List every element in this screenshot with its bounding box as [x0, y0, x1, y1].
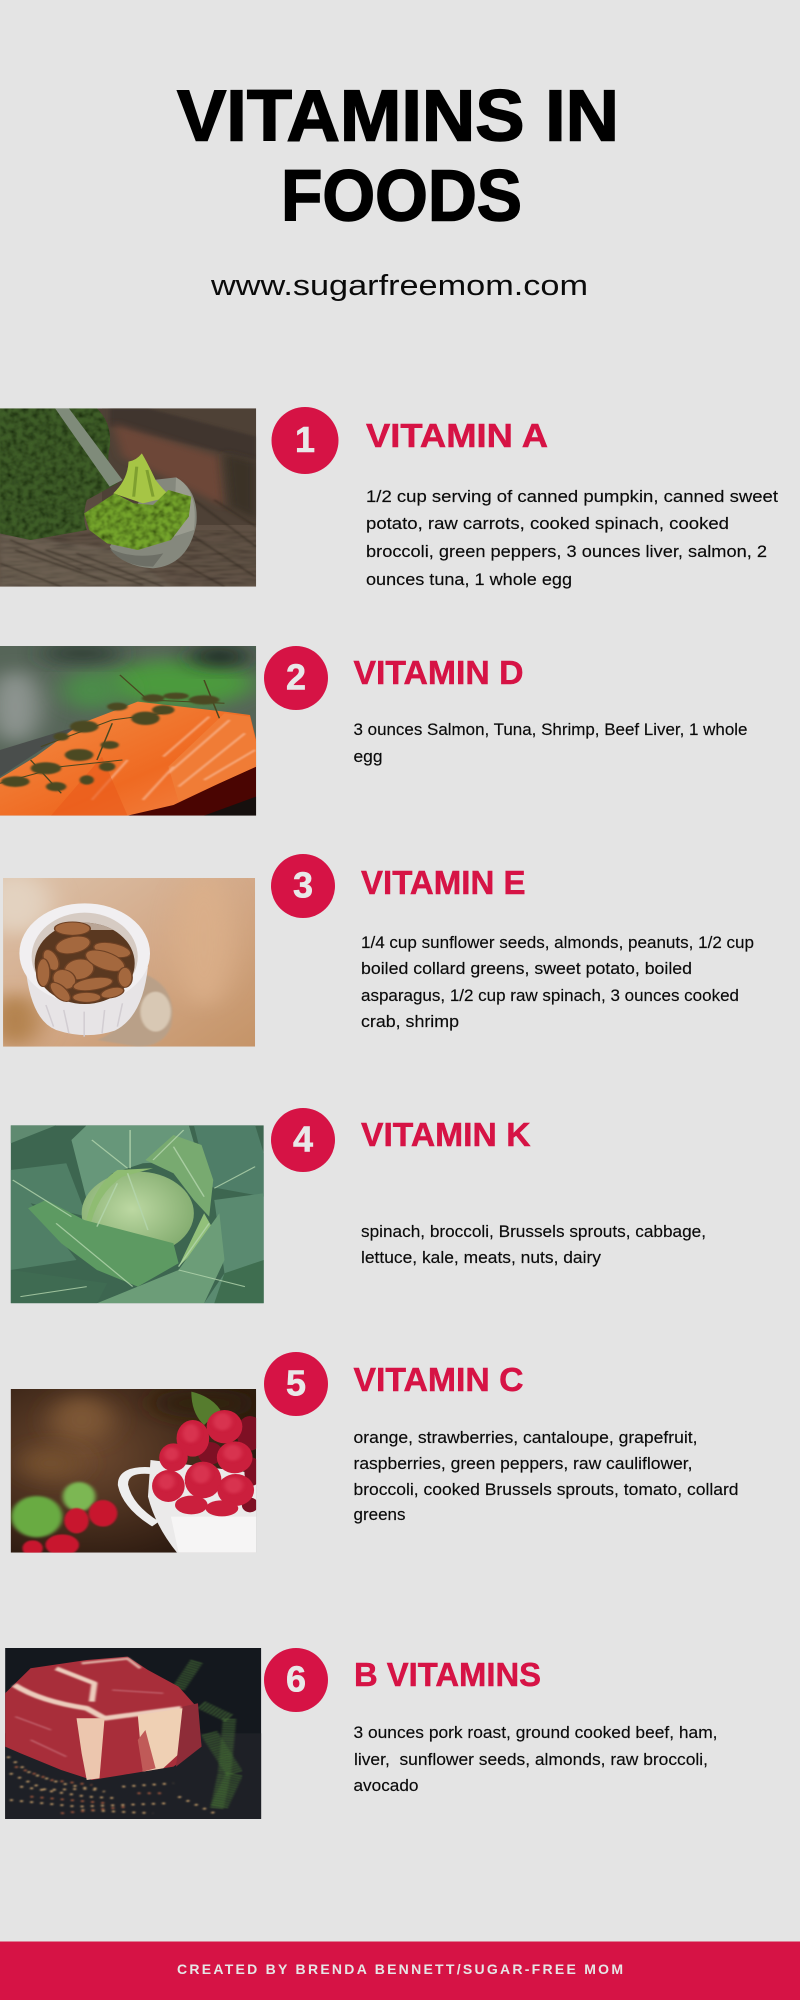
body text: vitamin C: raspberries, green peppers, raw cauliflower, — [354, 1454, 692, 1473]
number badge 1: 1 — [295, 419, 315, 460]
number badge 2: 2 — [286, 656, 306, 698]
number badge 6: 6 — [286, 1658, 306, 1700]
body text: B vitamins: 3 ounces pork roast, ground cooked beef, ham, — [354, 1723, 718, 1742]
number badge 1 — [272, 407, 338, 474]
image: salmon with herbs — [0, 645, 256, 816]
body text: B vitamins: liver, sunflower seeds, almonds, raw broccoli, — [354, 1750, 708, 1769]
number badge 4: 4 — [293, 1118, 313, 1160]
body text: B vitamins: avocado — [354, 1776, 418, 1795]
body text: vitamin A — [366, 487, 778, 589]
panel: vitamin K — [11, 1108, 706, 1303]
body text: vitamin E: boiled collard greens, sweet potato, boiled — [361, 959, 692, 978]
number badge 5: 5 — [286, 1362, 306, 1404]
heading: vitamin C: VITAMIN C — [354, 1361, 524, 1398]
panel: vitamin A — [0, 407, 778, 589]
number badge 2 — [264, 646, 328, 710]
heading: B vitamins: B VITAMINS — [354, 1656, 541, 1693]
title: VITAMINS IN — [177, 76, 619, 156]
body text: vitamin C: orange, strawberries, cantaloupe, grapefruit, — [354, 1428, 698, 1447]
body text: vitamin E: asparagus, 1/2 cup raw spinach, 3 ounces cooked — [361, 986, 739, 1005]
image: cabbage — [11, 1125, 264, 1303]
body text: vitamin A: 1/2 cup serving of canned pumpkin, canned sweet — [366, 487, 778, 506]
footer credit: CREATED BY BRENDA BENNETT/SUGAR-FREE MOM — [177, 1961, 623, 1977]
number badge 3 — [271, 854, 335, 918]
body text: vitamin C — [354, 1428, 738, 1524]
image: almonds in white bowl — [0, 873, 255, 1047]
body text: vitamin C: broccoli, cooked Brussels sprouts, tomato, collard — [354, 1480, 738, 1499]
heading: vitamin K: VITAMIN K — [361, 1116, 531, 1153]
body text: vitamin K: lettuce, kale, meats, nuts, dairy — [361, 1248, 601, 1267]
heading: vitamin A: VITAMIN A — [366, 417, 548, 454]
body text: vitamin A: potato, raw carrots, cooked spinach, cooked — [366, 514, 729, 533]
heading: vitamin D: VITAMIN D — [354, 654, 524, 691]
number badge 3: 3 — [293, 864, 313, 906]
body text: vitamin K: spinach, broccoli, Brussels sprouts, cabbage, — [361, 1222, 706, 1241]
body text: vitamin K — [361, 1222, 706, 1267]
title: FOODS — [281, 156, 522, 236]
body text: vitamin A: broccoli, green peppers, 3 ounces liver, salmon, 2 — [366, 542, 767, 561]
body text: vitamin E: 1/4 cup sunflower seeds, almonds, peanuts, 1/2 cup — [361, 933, 754, 952]
body text: vitamin D: egg — [354, 747, 382, 766]
number badge 5 — [264, 1352, 328, 1416]
body text: B vitamins — [354, 1723, 718, 1795]
panel: vitamin D — [0, 645, 747, 816]
body text: vitamin D: 3 ounces Salmon, Tuna, Shrimp, Beef Liver, 1 whole — [354, 720, 748, 739]
body text: vitamin E: crab, shrimp — [361, 1012, 459, 1031]
image: raw beef steak with rosemary — [5, 1648, 261, 1819]
body text: vitamin D — [354, 720, 748, 766]
website subtitle: www.sugarfreemom.com — [210, 270, 588, 302]
panel: vitamin C — [11, 1352, 739, 1556]
title — [177, 76, 619, 236]
heading: vitamin E: VITAMIN E — [361, 864, 526, 901]
footer band — [0, 1942, 800, 2000]
image: raspberries in white cup — [11, 1388, 263, 1556]
body text: vitamin E — [361, 933, 754, 1031]
image: broccoli on ladle — [0, 408, 256, 587]
panel: vitamin E — [0, 854, 754, 1047]
panel: B vitamins — [5, 1648, 718, 1819]
body text: vitamin A: ounces tuna, 1 whole egg — [366, 570, 572, 589]
body text: vitamin C: greens — [354, 1505, 406, 1524]
number badge 4 — [271, 1108, 335, 1172]
number badge 6 — [264, 1648, 328, 1712]
